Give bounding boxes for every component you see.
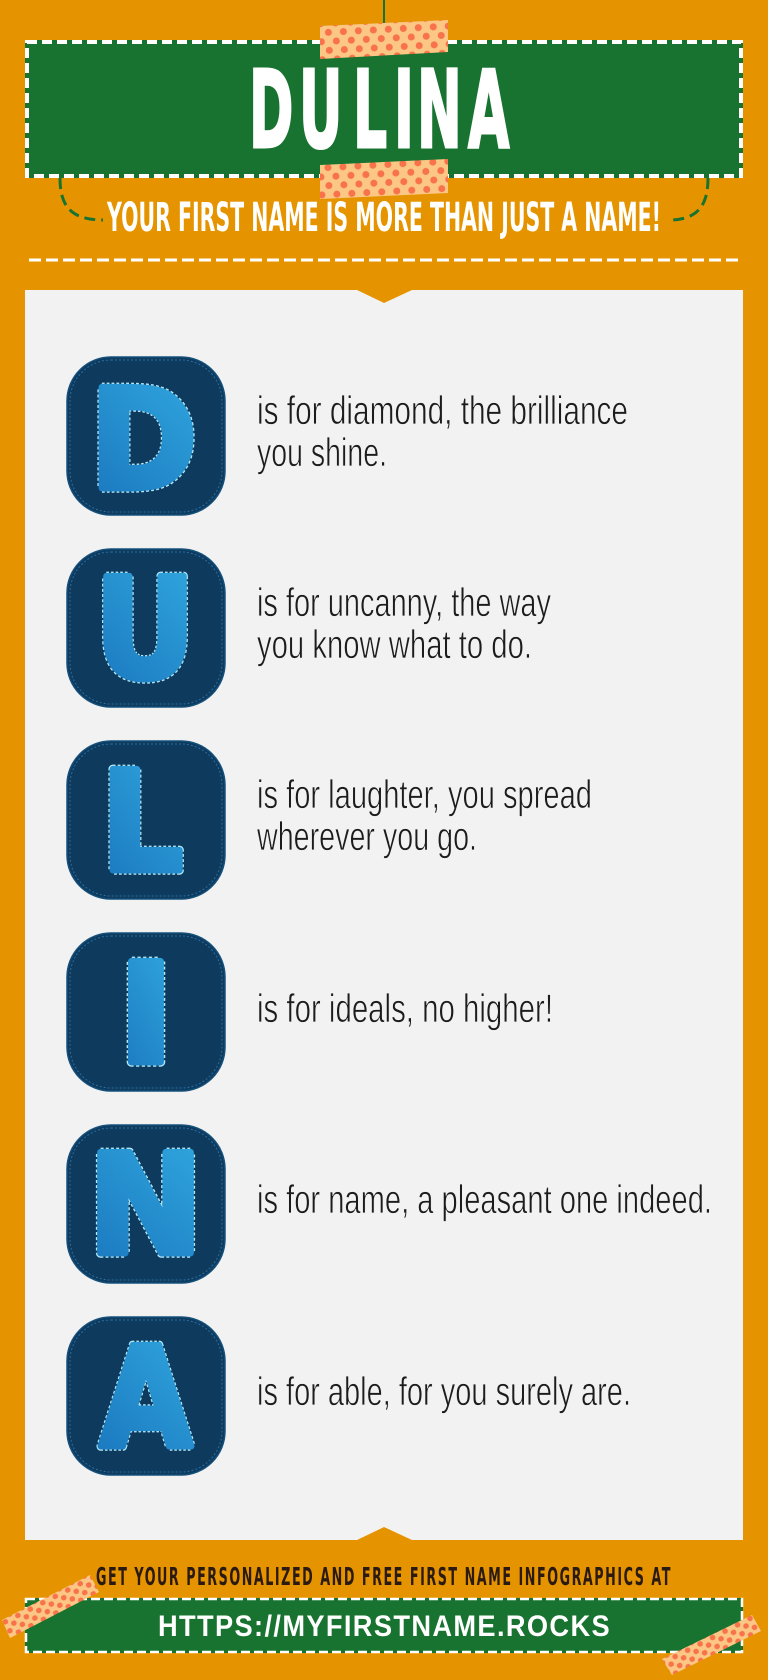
text: U: is for uncanny, the way [257, 581, 551, 625]
text: D [257, 389, 628, 475]
icon: letter I: I [118, 934, 174, 1095]
text: D: you shine. [257, 431, 387, 475]
icon: letter L: L [101, 742, 183, 903]
row: L [67, 741, 592, 903]
title: DULINA [249, 47, 510, 172]
icon: letter N: N [88, 1125, 203, 1286]
main panel [25, 290, 743, 1540]
icon: letter D: D [90, 360, 197, 521]
text: L [256, 773, 592, 859]
text: L: wherever you go. [256, 815, 477, 859]
header banner [25, 40, 743, 178]
icon: letter N: N [88, 1125, 203, 1286]
row: I [67, 933, 553, 1095]
text: A: is for able, for you surely are. [257, 1370, 631, 1414]
hanging line [383, 0, 385, 26]
icon: letter L [67, 741, 225, 903]
text: I: is for ideals, no higher! [257, 987, 553, 1031]
text: U [257, 581, 551, 667]
footer banner [25, 1598, 743, 1653]
icon: letter A: A [100, 1318, 192, 1479]
icon: letter I: I [118, 934, 174, 1095]
icon: letter I [67, 933, 225, 1095]
left curved connector [60, 178, 103, 220]
tape: footer right [662, 1615, 761, 1675]
tape: top [320, 20, 448, 59]
right curved connector [669, 178, 708, 220]
icon: letter A [67, 1317, 225, 1479]
footer url: HTTPS://MYFIRSTNAME.ROCKS [158, 1610, 611, 1643]
row: A [67, 1317, 631, 1479]
row: D [67, 357, 628, 521]
row: U [67, 549, 551, 710]
tape: footer left [2, 1575, 99, 1638]
icon: letter D: D [90, 360, 197, 521]
icon: letter U: U [95, 549, 195, 710]
tape: bottom [320, 159, 448, 199]
text: U: you know what to do. [257, 623, 532, 667]
icon: letter L: L [101, 742, 183, 903]
icon: letter U: U [95, 549, 195, 710]
icon: letter A: A [100, 1318, 192, 1479]
text: D: is for diamond, the brilliance [257, 389, 628, 433]
row: N [67, 1125, 712, 1286]
text: L: is for laughter, you spread [257, 773, 592, 817]
